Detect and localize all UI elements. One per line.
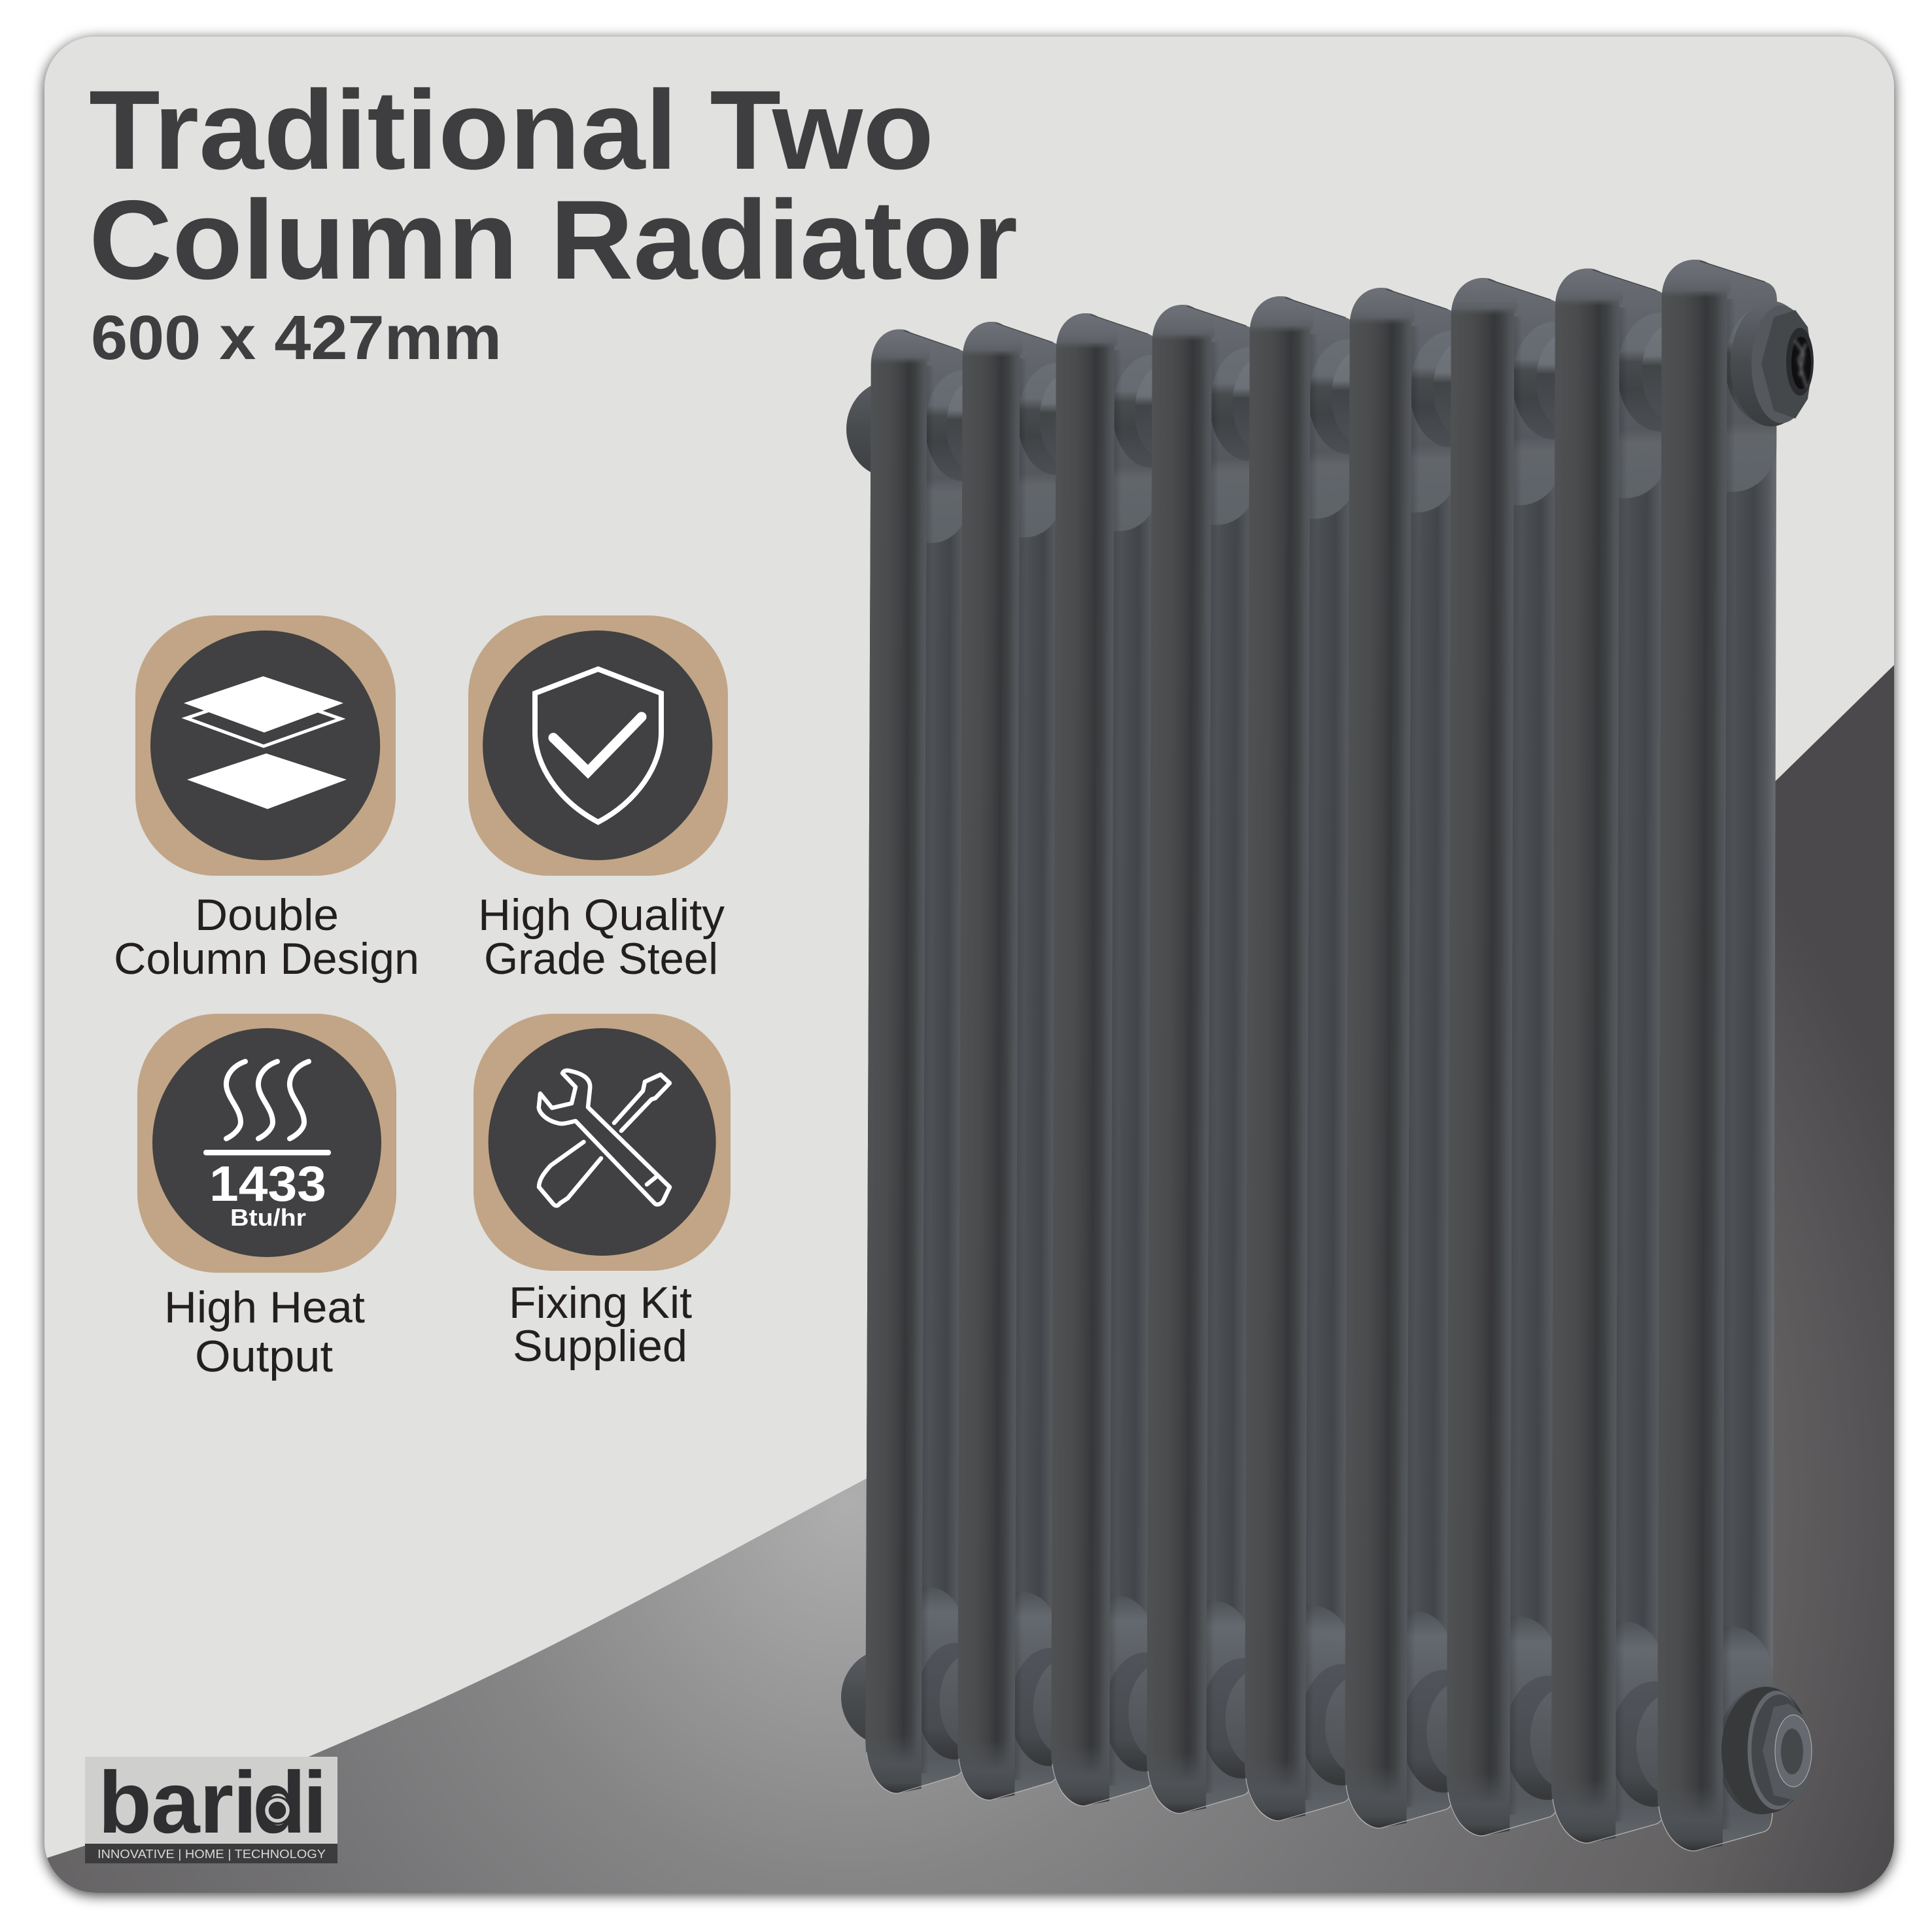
logo: baridi: baridi <box>98 1754 327 1852</box>
label: fixing kit supplied: Supplied <box>513 1321 687 1371</box>
label: double column design <box>114 890 419 984</box>
radiator column 8 <box>1551 268 1715 1843</box>
radiator column 5 <box>1245 296 1400 1821</box>
icon: heat output badge <box>137 1014 396 1273</box>
label: fixing kit supplied <box>509 1278 692 1371</box>
feature: fixing kit supplied <box>474 1014 731 1371</box>
icon: tools badge <box>474 1014 731 1271</box>
icon: heat output badge: Btu/hr <box>230 1204 306 1231</box>
bottom right plug end cap <box>1721 1687 1812 1814</box>
feature: double column design <box>114 615 419 984</box>
label: double column design: Double <box>195 890 339 940</box>
feature: high quality grade steel <box>468 615 728 984</box>
title <box>89 67 1018 303</box>
label: high quality grade steel <box>478 890 725 984</box>
icon: heat output badge: 1433 <box>209 1156 326 1212</box>
radiator column 1 <box>865 330 1010 1793</box>
label: high quality grade steel: High Quality <box>478 890 725 940</box>
label: high heat output <box>164 1283 365 1381</box>
subtitle: dimensions: 600 x 427mm <box>91 303 502 373</box>
label: fixing kit supplied: Fixing Kit <box>509 1278 692 1328</box>
radiator column 9 <box>1657 260 1824 1851</box>
title: Column Radiator <box>89 177 1018 303</box>
label: high heat output: Output <box>195 1332 333 1381</box>
radiator column 7 <box>1447 278 1608 1836</box>
radiator column 6 <box>1345 288 1504 1828</box>
radiator column 4 <box>1147 305 1300 1814</box>
title: Traditional Two <box>89 67 934 193</box>
radiator column 2 <box>957 322 1105 1800</box>
radiator product illustration <box>841 260 1824 1851</box>
dark gradient background swoosh <box>26 663 1897 1897</box>
icon: layers badge <box>135 615 396 876</box>
feature: high heat output <box>137 1014 396 1381</box>
icon: shield check badge <box>468 615 728 876</box>
left end stubs <box>841 381 935 1745</box>
logo: baridi: INNOVATIVE | HOME | TECHNOLOGY <box>97 1847 326 1861</box>
radiator column 3 <box>1051 313 1201 1806</box>
top right bleed valve end cap <box>1731 301 1814 426</box>
label: double column design: Column Design <box>114 934 419 984</box>
label: high heat output: High Heat <box>164 1283 365 1332</box>
label: high quality grade steel: Grade Steel <box>484 934 718 984</box>
